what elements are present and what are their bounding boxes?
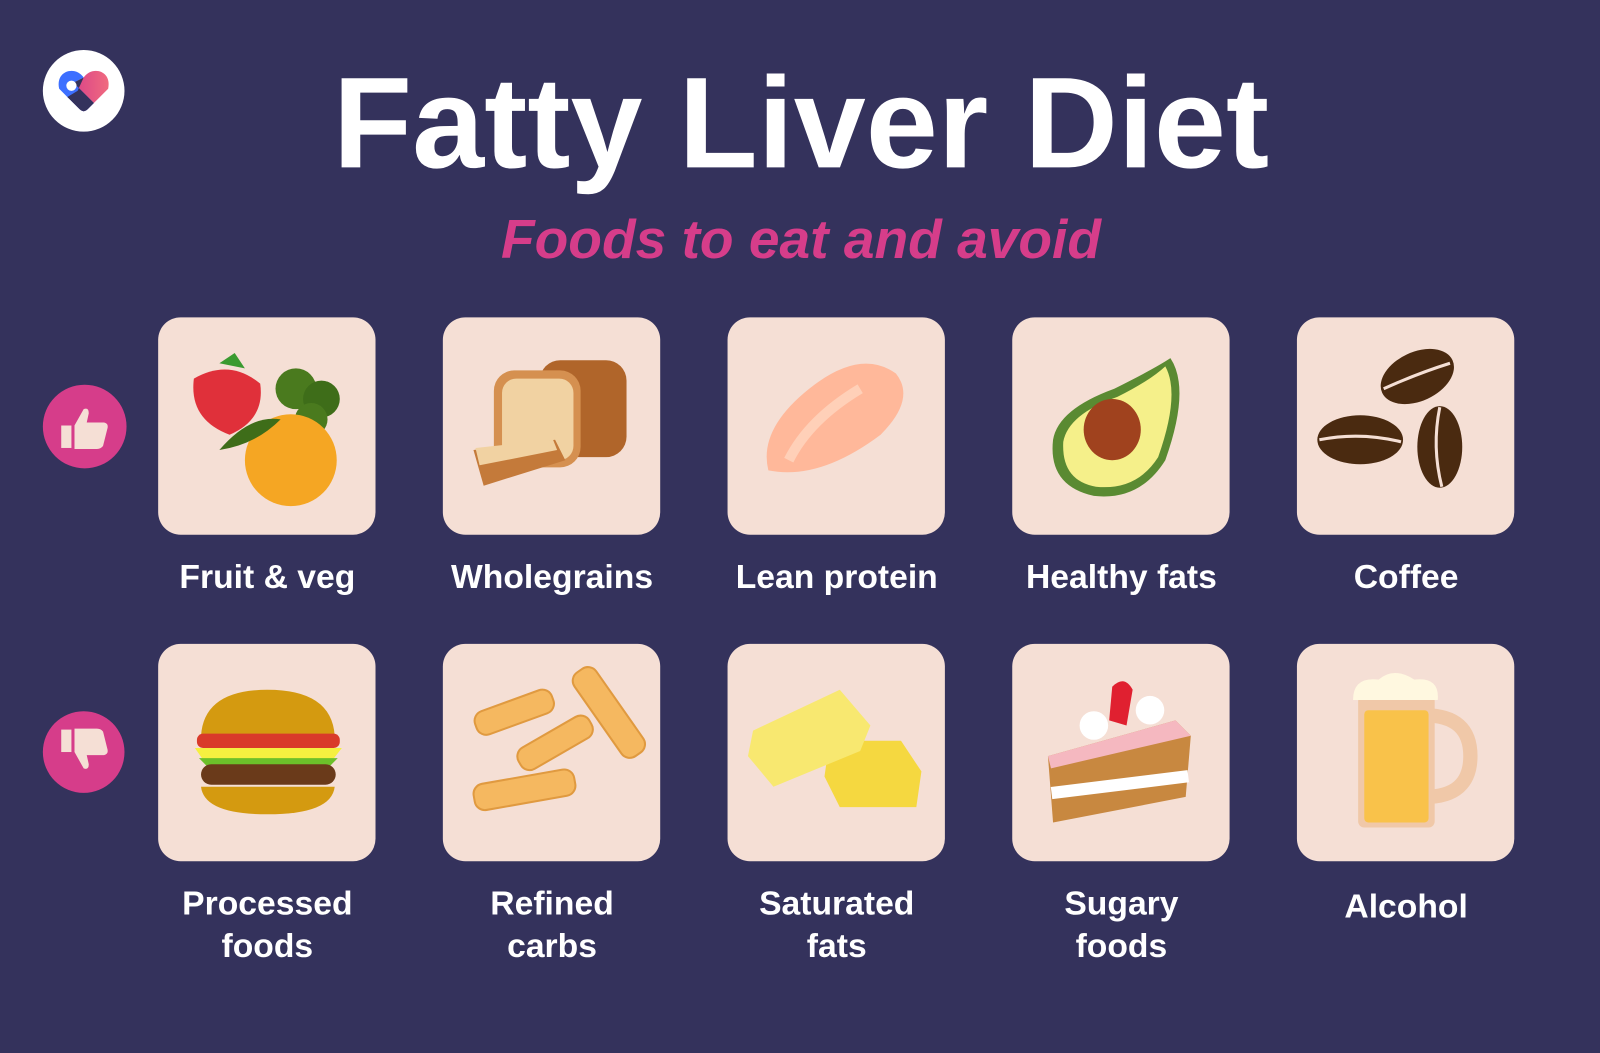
card: wholegrains	[443, 317, 660, 535]
card: sugary foods	[1012, 644, 1230, 861]
label: Refined	[490, 884, 614, 921]
label: Processed	[182, 884, 353, 921]
icon: thumbs up	[43, 385, 127, 468]
subtitle: Foods to eat and avoid	[501, 209, 1101, 270]
card: refined carbs	[443, 644, 660, 861]
icon: thumbs down	[43, 711, 124, 793]
card: alcohol	[1297, 644, 1514, 861]
label: Coffee	[1354, 557, 1459, 595]
card: lean protein	[728, 317, 945, 535]
title: Fatty Liver Diet	[333, 50, 1269, 195]
label: Sugary	[1064, 884, 1178, 921]
label	[1064, 884, 1178, 964]
label: Healthy fats	[1026, 557, 1217, 595]
label: Alcohol	[1344, 887, 1468, 924]
label	[759, 884, 914, 964]
label: foods	[222, 927, 313, 964]
label: foods	[1076, 927, 1167, 964]
label: carbs	[507, 927, 597, 964]
label: Wholegrains	[451, 557, 653, 595]
logo	[43, 50, 124, 132]
card: fruit & veg	[158, 317, 376, 535]
card: saturated fats	[728, 644, 945, 861]
label: Fruit & veg	[179, 557, 355, 595]
label	[490, 884, 614, 964]
card: processed foods	[158, 644, 376, 861]
label: Lean protein	[736, 557, 938, 595]
card: coffee	[1297, 317, 1514, 535]
card: healthy fats	[1012, 317, 1230, 535]
label: Saturated	[759, 884, 914, 921]
label: fats	[807, 927, 867, 964]
label	[182, 884, 353, 964]
